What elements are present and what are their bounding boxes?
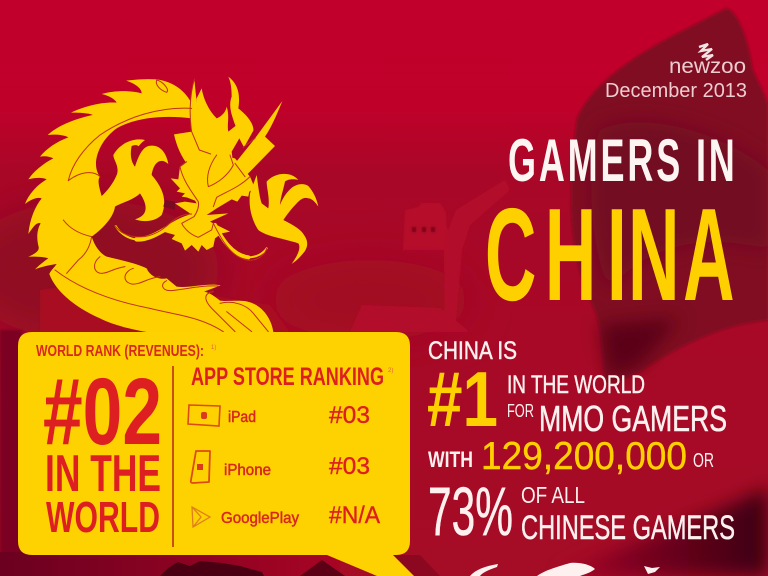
with: WITH [428,447,473,472]
dragon [25,77,318,332]
ipad label: iPad [228,409,256,426]
title: gamers in: GAMERS IN [508,128,735,194]
yellow ranking panel [18,332,414,576]
in the world: IN THE WORLD [507,371,645,399]
dragon body and mane [25,79,273,332]
icon: google play [192,507,210,527]
footnote 1: 1) [211,345,216,351]
lower left ground [0,552,440,576]
iphone label: iPhone [224,462,271,479]
dragon dark accents [163,200,175,210]
footnote 2: 2) [388,368,393,374]
china is: CHINA IS [428,337,517,365]
divider [172,366,174,547]
or: OR [693,450,714,472]
map fragments [470,563,660,576]
percentage: 73% [428,473,513,550]
panel speech bubble [18,332,414,576]
world: WORLD [46,493,160,542]
google play label: GooglePlay [221,510,299,527]
in the: IN THE [45,445,161,503]
dragon head and horns [163,77,282,252]
ipad rank: #03 [329,402,370,429]
dragon whiskers [116,217,267,257]
dragon red cut-outs [131,145,139,167]
gamer count: 129,200,000 [481,435,687,478]
number one: #1 [427,355,498,443]
lower right shadow [560,488,768,576]
world rank label: WORLD RANK (REVENUES): [36,343,204,360]
of all: OF ALL [521,482,585,508]
world rank value: #02 [43,359,162,465]
rock formation [571,8,768,385]
for: FOR [507,401,534,421]
great wall tower [350,180,510,332]
mmo statistic block [427,337,735,550]
iphone rank: #03 [329,453,370,480]
icon: ipad [188,405,220,426]
title: china: CHINA [485,182,735,329]
dragon right claw [250,174,318,264]
icon: iphone [191,451,210,483]
logo: newzoo mark [699,44,713,60]
dragon outline strokes [55,79,268,332]
date: December 2013 [605,80,747,102]
google play rank: #N/A [329,502,380,529]
logo: newzoo wordmark: newzoo [669,55,746,78]
app store heading: APP STORE RANKING [191,363,384,391]
